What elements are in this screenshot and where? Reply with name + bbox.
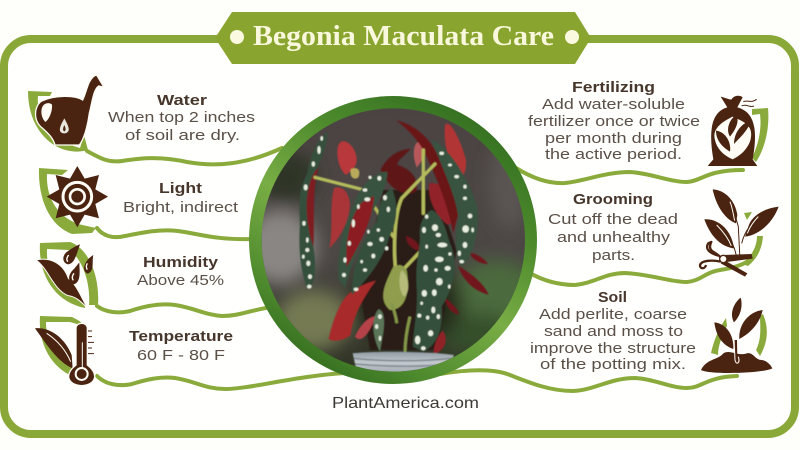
fertilizing block [528, 79, 700, 163]
dark centre [360, 190, 457, 350]
fertilizing block: Fertilizing [572, 79, 655, 96]
grooming block: Grooming [573, 191, 653, 208]
humidity block [137, 254, 224, 289]
spotted green leaves [299, 132, 327, 289]
connector curve: grooming [528, 212, 763, 285]
grooming block: Cut off the dead [548, 211, 678, 228]
soil block: sand and moss to [544, 323, 683, 340]
connector curve: humidity [40, 242, 272, 316]
leaf spots [302, 136, 474, 350]
grooming block [548, 191, 678, 264]
stems [315, 150, 435, 277]
water block [108, 92, 255, 144]
light block: Bright, indirect [123, 199, 239, 216]
fertilizing block: per month during [545, 130, 682, 147]
soil block: Add perlite, coarse [539, 306, 687, 323]
soil block: improve the structure [530, 340, 696, 357]
icon: thermometer and leaf [35, 323, 95, 386]
red leaves [337, 141, 357, 175]
icon: sun [47, 166, 108, 227]
pot [353, 352, 454, 373]
temperature block: 60 F - 80 F [137, 347, 225, 364]
icon: leaves and shears [700, 189, 779, 277]
connector curve: temperature and soil [40, 314, 767, 391]
water block: of soil are dry. [125, 127, 240, 144]
icon: fertilizer bag [708, 96, 757, 166]
connector curve: fertilizing [516, 108, 768, 183]
photo background [262, 108, 525, 372]
connector curve: light [39, 168, 252, 239]
humidity block: Above 45% [137, 272, 224, 289]
icon: seedling in soil [701, 298, 772, 373]
fertilizing block: Add water-soluble [542, 96, 685, 113]
icon: humidity leaf and drops [36, 244, 93, 309]
humidity block: Humidity [143, 254, 219, 271]
grooming block: and unhealthy [557, 229, 671, 246]
grooming block: parts. [592, 247, 635, 264]
icon: watering can [36, 75, 104, 145]
temperature block: Temperature [129, 328, 233, 345]
soil block [530, 289, 696, 373]
water block: When top 2 inches [108, 109, 255, 126]
source credit: PlantAmerica.com [332, 395, 479, 412]
begonia plant [299, 121, 489, 373]
connector curve: water [28, 91, 282, 164]
temperature block [129, 328, 233, 364]
fertilizing block: the active period. [545, 146, 682, 163]
title banner: Begonia Maculata Care [253, 21, 554, 52]
light block: Light [159, 180, 202, 197]
soil block: Soil [598, 289, 627, 306]
title banner [215, 12, 591, 64]
water block: Water [157, 92, 207, 109]
soil block: of the potting mix. [540, 356, 686, 373]
plant photo circle [243, 96, 540, 384]
light block [123, 180, 239, 216]
fertilizing block: fertilizer once or twice [528, 113, 700, 130]
